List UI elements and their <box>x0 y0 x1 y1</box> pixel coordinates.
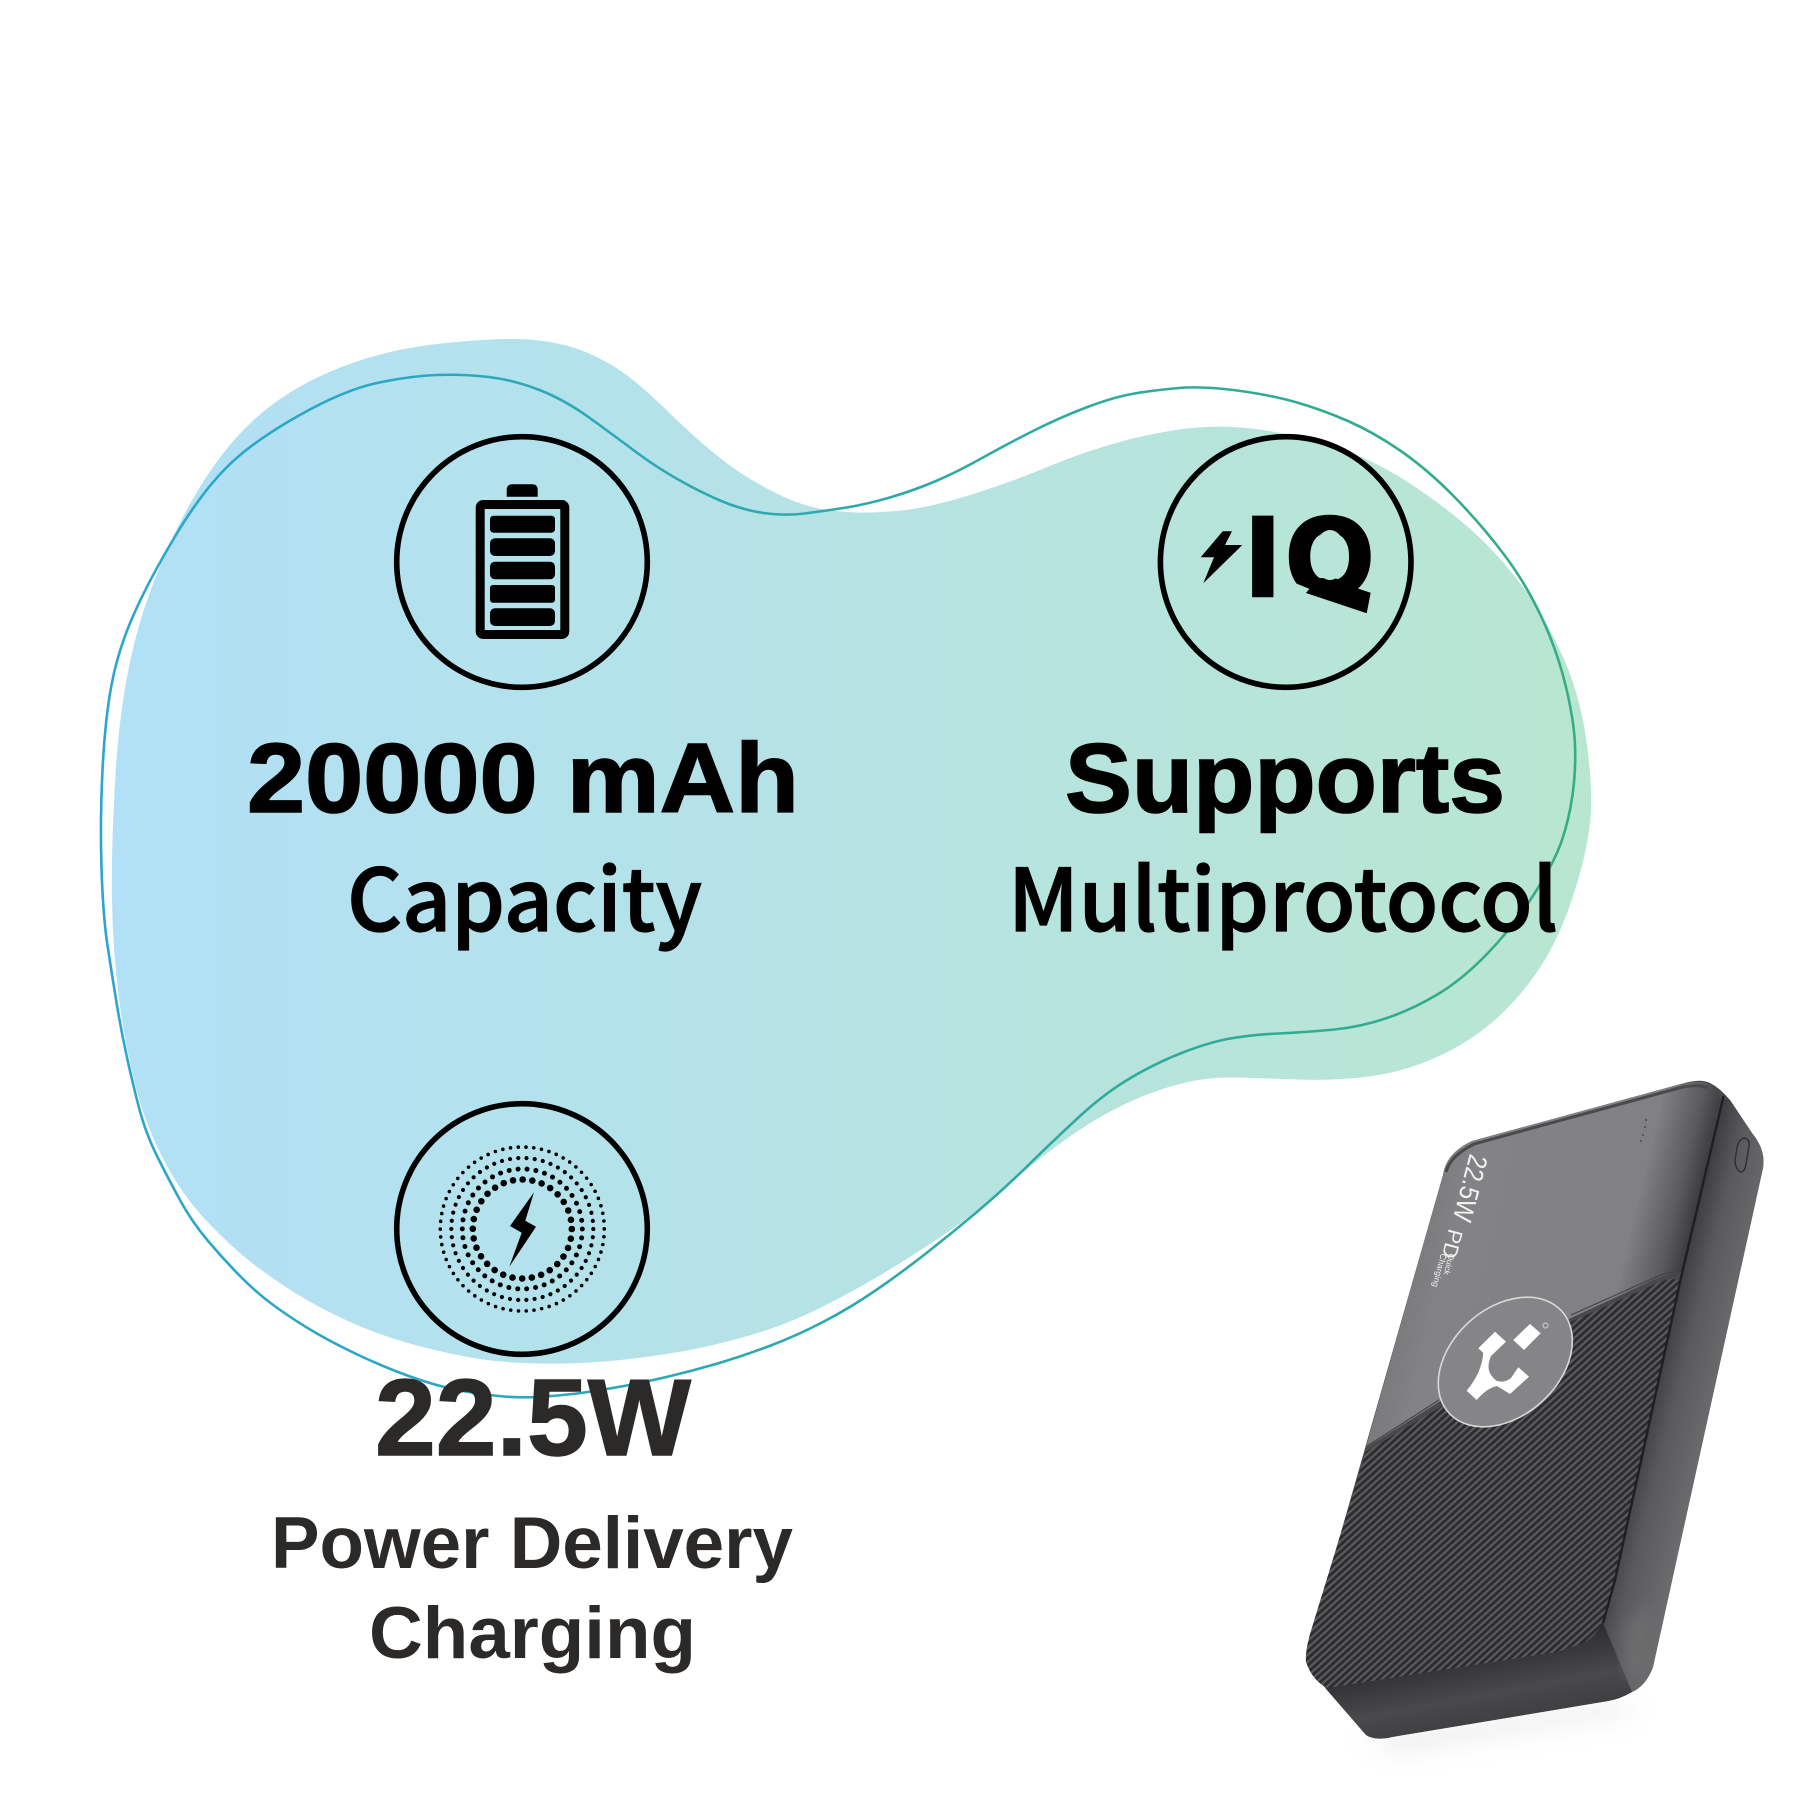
logo mark <box>1467 1324 1541 1400</box>
text: 20000 mAh Capacity: 20000 mAh <box>247 723 799 833</box>
front side panel <box>1306 1623 1632 1739</box>
icon: IQ quick charge in circle: I <box>1248 496 1278 618</box>
icon: IQ quick charge in circle: Q <box>1287 496 1373 618</box>
text: 22.5W Power Delivery Charging: Charging <box>369 1593 696 1674</box>
icon: IQ quick charge in circle <box>1160 437 1411 687</box>
text: 20000 mAh Capacity <box>247 723 799 956</box>
shadow under device <box>1360 1702 1640 1752</box>
indicator dots <box>1640 1119 1647 1142</box>
icon: battery in circle <box>397 437 647 687</box>
power button <box>1735 1138 1749 1172</box>
text: Supports Multiprotocol: Supports <box>1065 723 1505 833</box>
blob outline <box>101 375 1575 1397</box>
device label: 22.5W PD Quick Charging: 22.5W <box>1447 1151 1493 1225</box>
right side panel <box>1603 1098 1764 1692</box>
device label: 22.5W PD Quick Charging <box>1430 1151 1493 1289</box>
top edge shade <box>1446 1086 1708 1172</box>
upper face <box>1366 1082 1721 1448</box>
text: Supports Multiprotocol <box>1008 723 1558 956</box>
icon: wireless charging dots in circle <box>397 1104 647 1354</box>
device label: 22.5W PD Quick Charging: PD <box>1437 1227 1466 1261</box>
lower ribbed face <box>1306 1279 1680 1688</box>
text: 22.5W Power Delivery Charging: 22.5W <box>375 1357 691 1479</box>
device label: 22.5W PD Quick Charging: Charging <box>1430 1252 1449 1289</box>
device body silhouette <box>1306 1081 1764 1739</box>
text: 22.5W Power Delivery Charging <box>271 1357 793 1674</box>
registered mark <box>1543 1323 1548 1328</box>
background blob <box>112 339 1591 1364</box>
corner highlight on side <box>1625 1600 1650 1680</box>
text: 20000 mAh Capacity: Capacity <box>347 831 702 956</box>
power bank product <box>1306 1081 1764 1752</box>
seam line <box>1603 1096 1724 1623</box>
text: Supports Multiprotocol: Multiprotocol <box>1008 831 1558 956</box>
band line <box>1366 1272 1681 1447</box>
text: 22.5W Power Delivery Charging: Power Delivery <box>271 1503 793 1584</box>
device label: 22.5W PD Quick Charging: Quick <box>1441 1252 1457 1277</box>
logo medallion <box>1413 1271 1598 1453</box>
